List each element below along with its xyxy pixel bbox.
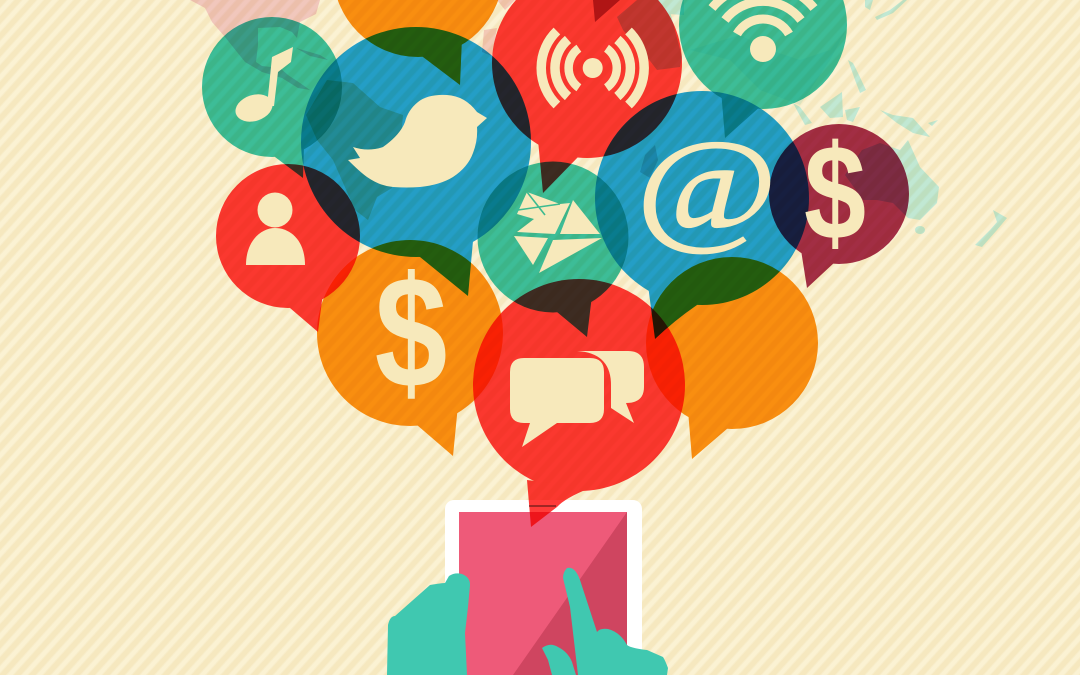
bubble: blue at sign: [595, 91, 809, 339]
left hand: [387, 573, 470, 675]
bubble: maroon dollar: [769, 124, 909, 288]
bubble: red person: [216, 164, 360, 332]
bubble: orange right: [646, 257, 818, 459]
bubble: teal wifi: [679, 0, 847, 138]
land: pink coast: [482, 0, 515, 56]
land: madagascar: [640, 145, 658, 178]
tablet screen shadow: [513, 512, 627, 675]
tail: dark red top: [593, 0, 620, 22]
tablet: [445, 500, 642, 675]
tablet frame: [445, 500, 642, 675]
bubble: teal music: [202, 17, 342, 178]
thumb: [542, 645, 576, 675]
icon: orange dollar sign: $: [375, 243, 447, 421]
icon: wifi: [712, 0, 814, 62]
world map: [190, 0, 1007, 247]
icon: at sign: @: [636, 114, 776, 257]
land: australia: [845, 140, 939, 220]
icon: chat bubbles: [510, 351, 644, 447]
tablet edge line: [529, 506, 556, 507]
icon: maroon dollar sign: $: [804, 118, 866, 268]
icon: broken envelope: [514, 192, 602, 273]
land: new zealand: [975, 210, 1007, 247]
land: islands of asia: [793, 0, 938, 137]
bubble: teal envelope: [478, 162, 628, 337]
bubble: blue twitter: [301, 27, 531, 296]
bubble: red broadcast: [492, 0, 682, 193]
bubble: orange top: [333, 0, 503, 85]
land: europe and africa: [617, 0, 684, 70]
land: north america: [190, 0, 328, 90]
icon: music note: [232, 47, 293, 126]
icon: twitter bird: [348, 95, 487, 188]
land: east asia under wifi bubble: [690, 30, 846, 105]
land: south america: [306, 80, 403, 220]
bubble: orange dollar: [317, 240, 503, 456]
pointing finger and palm: [563, 568, 668, 675]
icon: person: [246, 192, 305, 265]
tablet screen: [459, 512, 627, 675]
land: tasmania: [915, 226, 925, 234]
bubble: red chat: [473, 279, 685, 527]
icon: broadcast signal: [541, 31, 644, 105]
right hand: [542, 568, 668, 675]
